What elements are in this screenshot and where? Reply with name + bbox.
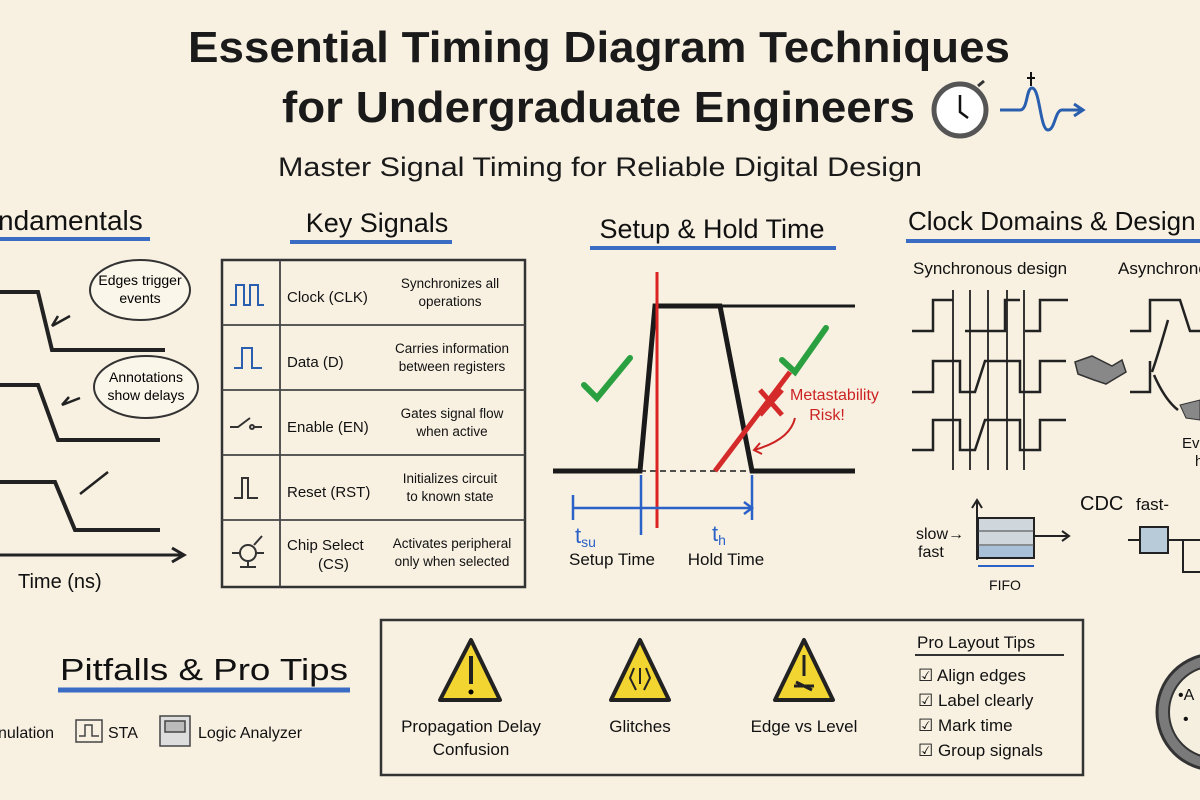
check marks <box>584 328 826 398</box>
waveform <box>553 306 855 471</box>
waveforms <box>0 292 184 562</box>
table: Activates peripheral <box>393 536 511 551</box>
table: Initializes circuit <box>403 471 498 486</box>
pro layout tips: ☑ Align edges <box>918 666 1026 685</box>
red clock edge line <box>656 272 658 528</box>
pro layout tips: ☑ Label clearly <box>918 691 1034 710</box>
table <box>222 260 525 587</box>
panel: setup and hold <box>553 214 879 569</box>
heading: key signals: Key Signals <box>306 208 448 238</box>
table: Chip Select <box>287 537 365 554</box>
axis label: Time (ns) <box>18 571 102 593</box>
panel: setup and hold: Hold Time <box>688 550 764 569</box>
FIFO diagram: fast <box>918 544 944 561</box>
panel: clock domains <box>906 206 1200 593</box>
icon: gear: • <box>1183 711 1189 728</box>
callout: annotations show delays: show delays <box>107 387 185 403</box>
icon: handshake <box>1075 356 1126 384</box>
table: only when selected <box>395 554 509 569</box>
heading: fundamentals: ndamentals <box>0 205 143 236</box>
pro layout tips: ☑ Group signals <box>918 741 1043 760</box>
title <box>188 23 1010 132</box>
metastability callout: Metastability <box>790 387 879 404</box>
tools row: STA <box>108 725 138 742</box>
pro layout tips <box>915 633 1064 760</box>
icon: gear: •A <box>1178 687 1195 704</box>
dimension lines: su <box>581 534 596 550</box>
panel: pitfalls heading: Pitfalls & Pro Tips <box>60 652 348 687</box>
synchronous waveforms <box>912 290 1068 470</box>
callout: annotations show delays: Annotations <box>109 369 183 385</box>
dimension lines: h <box>718 532 726 548</box>
synchronizer <box>1128 527 1200 572</box>
title: for Undergraduate Engineers <box>282 83 915 132</box>
table: Carries information <box>395 341 509 356</box>
dimension lines: t <box>712 521 718 546</box>
panel: key signals <box>222 208 525 587</box>
icon: waveform <box>1000 72 1083 130</box>
table: Synchronizes all <box>401 276 499 291</box>
table: operations <box>418 294 482 309</box>
panel: clock domains: fast- <box>1136 495 1169 514</box>
icon: warning edge vs level <box>775 640 833 700</box>
panel: pitfalls box <box>381 620 1083 775</box>
panel: pitfalls box: Confusion <box>433 740 509 759</box>
panel: fundamentals <box>0 205 198 593</box>
CDC label: CDC <box>1080 493 1123 515</box>
table: Reset (RST) <box>287 484 370 501</box>
metastability callout: Risk! <box>809 407 845 424</box>
asynchronous waveforms <box>1130 300 1200 410</box>
icon: stopwatch <box>934 81 986 136</box>
panel: setup and hold: Setup Time <box>569 550 655 569</box>
callout: edges trigger events <box>90 260 190 320</box>
table: Clock (CLK) <box>287 289 368 306</box>
title: Essential Timing Diagram Techniques <box>188 23 1010 72</box>
panel: pitfalls box: Glitches <box>609 717 671 736</box>
table: Data (D) <box>287 354 344 371</box>
panel: pitfalls box: Edge vs Level <box>751 717 857 736</box>
heading: setup and hold: Setup & Hold Time <box>599 214 825 244</box>
dimension lines: t <box>575 523 581 548</box>
metastability callout <box>715 372 879 471</box>
FIFO diagram <box>916 500 1069 593</box>
pro layout tips: Pro Layout Tips <box>917 633 1035 652</box>
table: to known state <box>406 489 494 504</box>
FIFO diagram: FIFO <box>989 577 1021 593</box>
callout: annotations show delays <box>94 356 198 418</box>
panel: clock domains: Synchronous design <box>913 259 1067 278</box>
dimension lines <box>573 475 752 550</box>
table: (CS) <box>318 556 349 573</box>
tools row: Logic Analyzer <box>198 725 303 742</box>
tools row <box>0 716 303 746</box>
table: when active <box>415 424 488 439</box>
heading: clock domains: Clock Domains & Design <box>908 206 1196 236</box>
table: Enable (EN) <box>287 419 369 436</box>
table: between registers <box>399 359 506 374</box>
FIFO diagram: slow→ <box>916 526 964 543</box>
table: Gates signal flow <box>401 406 504 421</box>
icon: warning propagation <box>440 640 500 700</box>
pro layout tips: ☑ Mark time <box>918 716 1013 735</box>
subtitle: Master Signal Timing for Reliable Digital Design <box>278 152 922 182</box>
panel: pitfalls box: Propagation Delay <box>401 717 541 736</box>
callout: edges trigger events: events <box>119 290 161 306</box>
icon: warning glitches <box>611 640 669 700</box>
callout: edges trigger events: Edges trigger <box>98 272 182 288</box>
icon: gear <box>1157 654 1200 770</box>
